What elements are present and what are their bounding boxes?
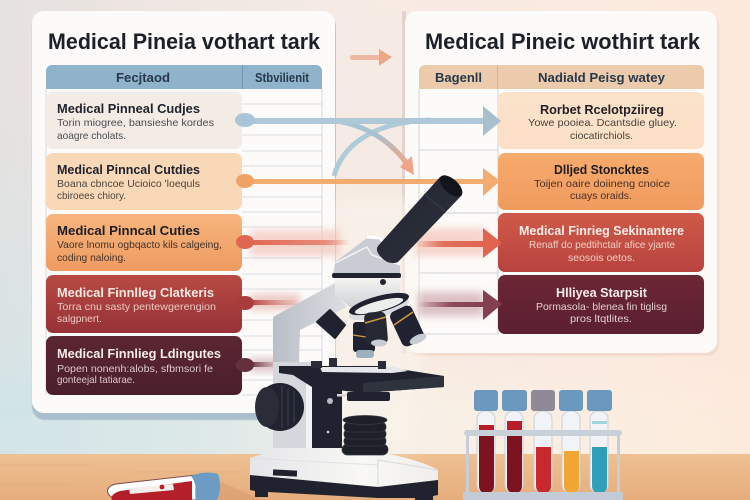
rack frame bbox=[463, 430, 623, 500]
left card 5 bbox=[46, 336, 242, 395]
left table grid bbox=[46, 89, 322, 395]
arrow: crossing curves bbox=[330, 120, 430, 176]
eyepiece tube bbox=[377, 171, 466, 263]
test tube rack bbox=[463, 390, 623, 500]
tube 4 bbox=[559, 390, 583, 494]
microscope base bbox=[250, 445, 438, 500]
panel: centre gap shading bbox=[336, 11, 406, 361]
left card 3: Medical Pinncal Cuties bbox=[57, 223, 200, 238]
right card 1: Yowe pooiea. Dcantsdie gluey. bbox=[528, 117, 677, 129]
test tube lying on table bbox=[108, 473, 262, 500]
right table grid bbox=[419, 89, 498, 334]
left card 2: Boana cbncoe Ucioico 'loequls bbox=[57, 178, 200, 190]
panel: right table bbox=[405, 11, 719, 356]
right table header bbox=[419, 65, 704, 89]
left card 3: coding naloing. bbox=[57, 252, 126, 264]
objective lenses bbox=[353, 304, 428, 358]
tube 3 bbox=[531, 390, 555, 494]
rack back bbox=[466, 430, 620, 494]
left card 1: Medical Pinneal Cudjes bbox=[57, 101, 200, 116]
left table header: Fecjtaod bbox=[116, 71, 170, 85]
left card 5: gonteejal tatiarae. bbox=[57, 374, 135, 386]
left card 5: Medical Finnlieg Ldingutes bbox=[57, 346, 221, 361]
panel: left table bbox=[32, 11, 336, 420]
tube 5 bbox=[587, 390, 612, 494]
tube 1 bbox=[474, 390, 498, 494]
left card 2: cbiroees chiory. bbox=[57, 190, 126, 202]
left card 1: aoagre cholats. bbox=[57, 130, 126, 142]
right card 3 bbox=[498, 213, 704, 272]
left card 3 bbox=[46, 214, 242, 271]
left card 4: Medical Finnlleg Clatkeris bbox=[57, 285, 214, 300]
arrow: dark row 5 bbox=[236, 358, 280, 372]
focus knob bbox=[255, 383, 304, 431]
arrow: top small salmon bbox=[350, 49, 392, 66]
soft halo behind microscope bbox=[335, 200, 420, 450]
right card 4: pros ltqtlites. bbox=[570, 313, 632, 325]
right card 2: Dlljed Stoncktes bbox=[554, 162, 649, 177]
left card 1 bbox=[46, 92, 242, 149]
left card 2 bbox=[46, 153, 242, 210]
right title: Medical Pineic wothirt tark bbox=[425, 29, 701, 54]
tube 2 bbox=[502, 390, 527, 494]
right table header: Nadiald Peisg watey bbox=[538, 71, 665, 85]
right card 4: Hlliyea Starpsit bbox=[556, 285, 648, 300]
left table header: Stbvilienit bbox=[255, 71, 310, 85]
right table header: Bagenll bbox=[435, 71, 482, 85]
arrow: dark red row 4 bbox=[236, 290, 502, 320]
right card 1: Rorbet Rcelotpziireg bbox=[540, 102, 664, 117]
right card 3: seosois oetos. bbox=[568, 252, 635, 264]
left title: Medical Pineia vothart tark bbox=[48, 29, 321, 54]
right card 4: Pormasola- blenea fin tiglisg bbox=[536, 301, 667, 313]
wooden table bbox=[0, 454, 750, 500]
left card 5: Popen nonenh:alobs, sfbmsori fe bbox=[57, 363, 213, 375]
arrow: red row 3 bbox=[236, 228, 502, 258]
left card 4 bbox=[46, 275, 242, 333]
left card 3: Vaore lnomu ogbqacto kils calgeing, bbox=[57, 239, 222, 251]
arrow: orange row 2 bbox=[236, 168, 500, 196]
right card 2 bbox=[498, 153, 704, 210]
microscope arm bbox=[273, 283, 347, 362]
microscope body bbox=[273, 362, 342, 448]
side knob bbox=[317, 310, 345, 338]
left table header bbox=[46, 65, 322, 89]
right card 3: Renaff do pedtihctalr afice yjante bbox=[529, 239, 675, 251]
stage bbox=[279, 358, 444, 401]
right card 1: ciocatirchiols. bbox=[570, 130, 633, 142]
right card 2: cuays oraids. bbox=[570, 190, 632, 202]
microscope head bbox=[332, 237, 401, 307]
right card 2: Toijen oaire doiineng cnoice bbox=[534, 178, 670, 190]
microscope bbox=[250, 171, 466, 500]
right card 3: Medical Finrieg Sekinantere bbox=[519, 223, 684, 238]
right card 1 bbox=[498, 92, 704, 149]
left card 1: Torin miogree, bansieshe kordes bbox=[57, 117, 214, 129]
left card 4: salgpnert. bbox=[57, 313, 102, 325]
arrow: blue row 1 bbox=[235, 106, 501, 136]
condenser bellows bbox=[342, 416, 388, 455]
right card 4 bbox=[498, 275, 704, 334]
left card 2: Medical Pinncal Cutdies bbox=[57, 162, 200, 177]
left card 4: Torra cnu sasty pentewgerengion bbox=[57, 301, 216, 313]
nosepiece bbox=[347, 288, 411, 325]
